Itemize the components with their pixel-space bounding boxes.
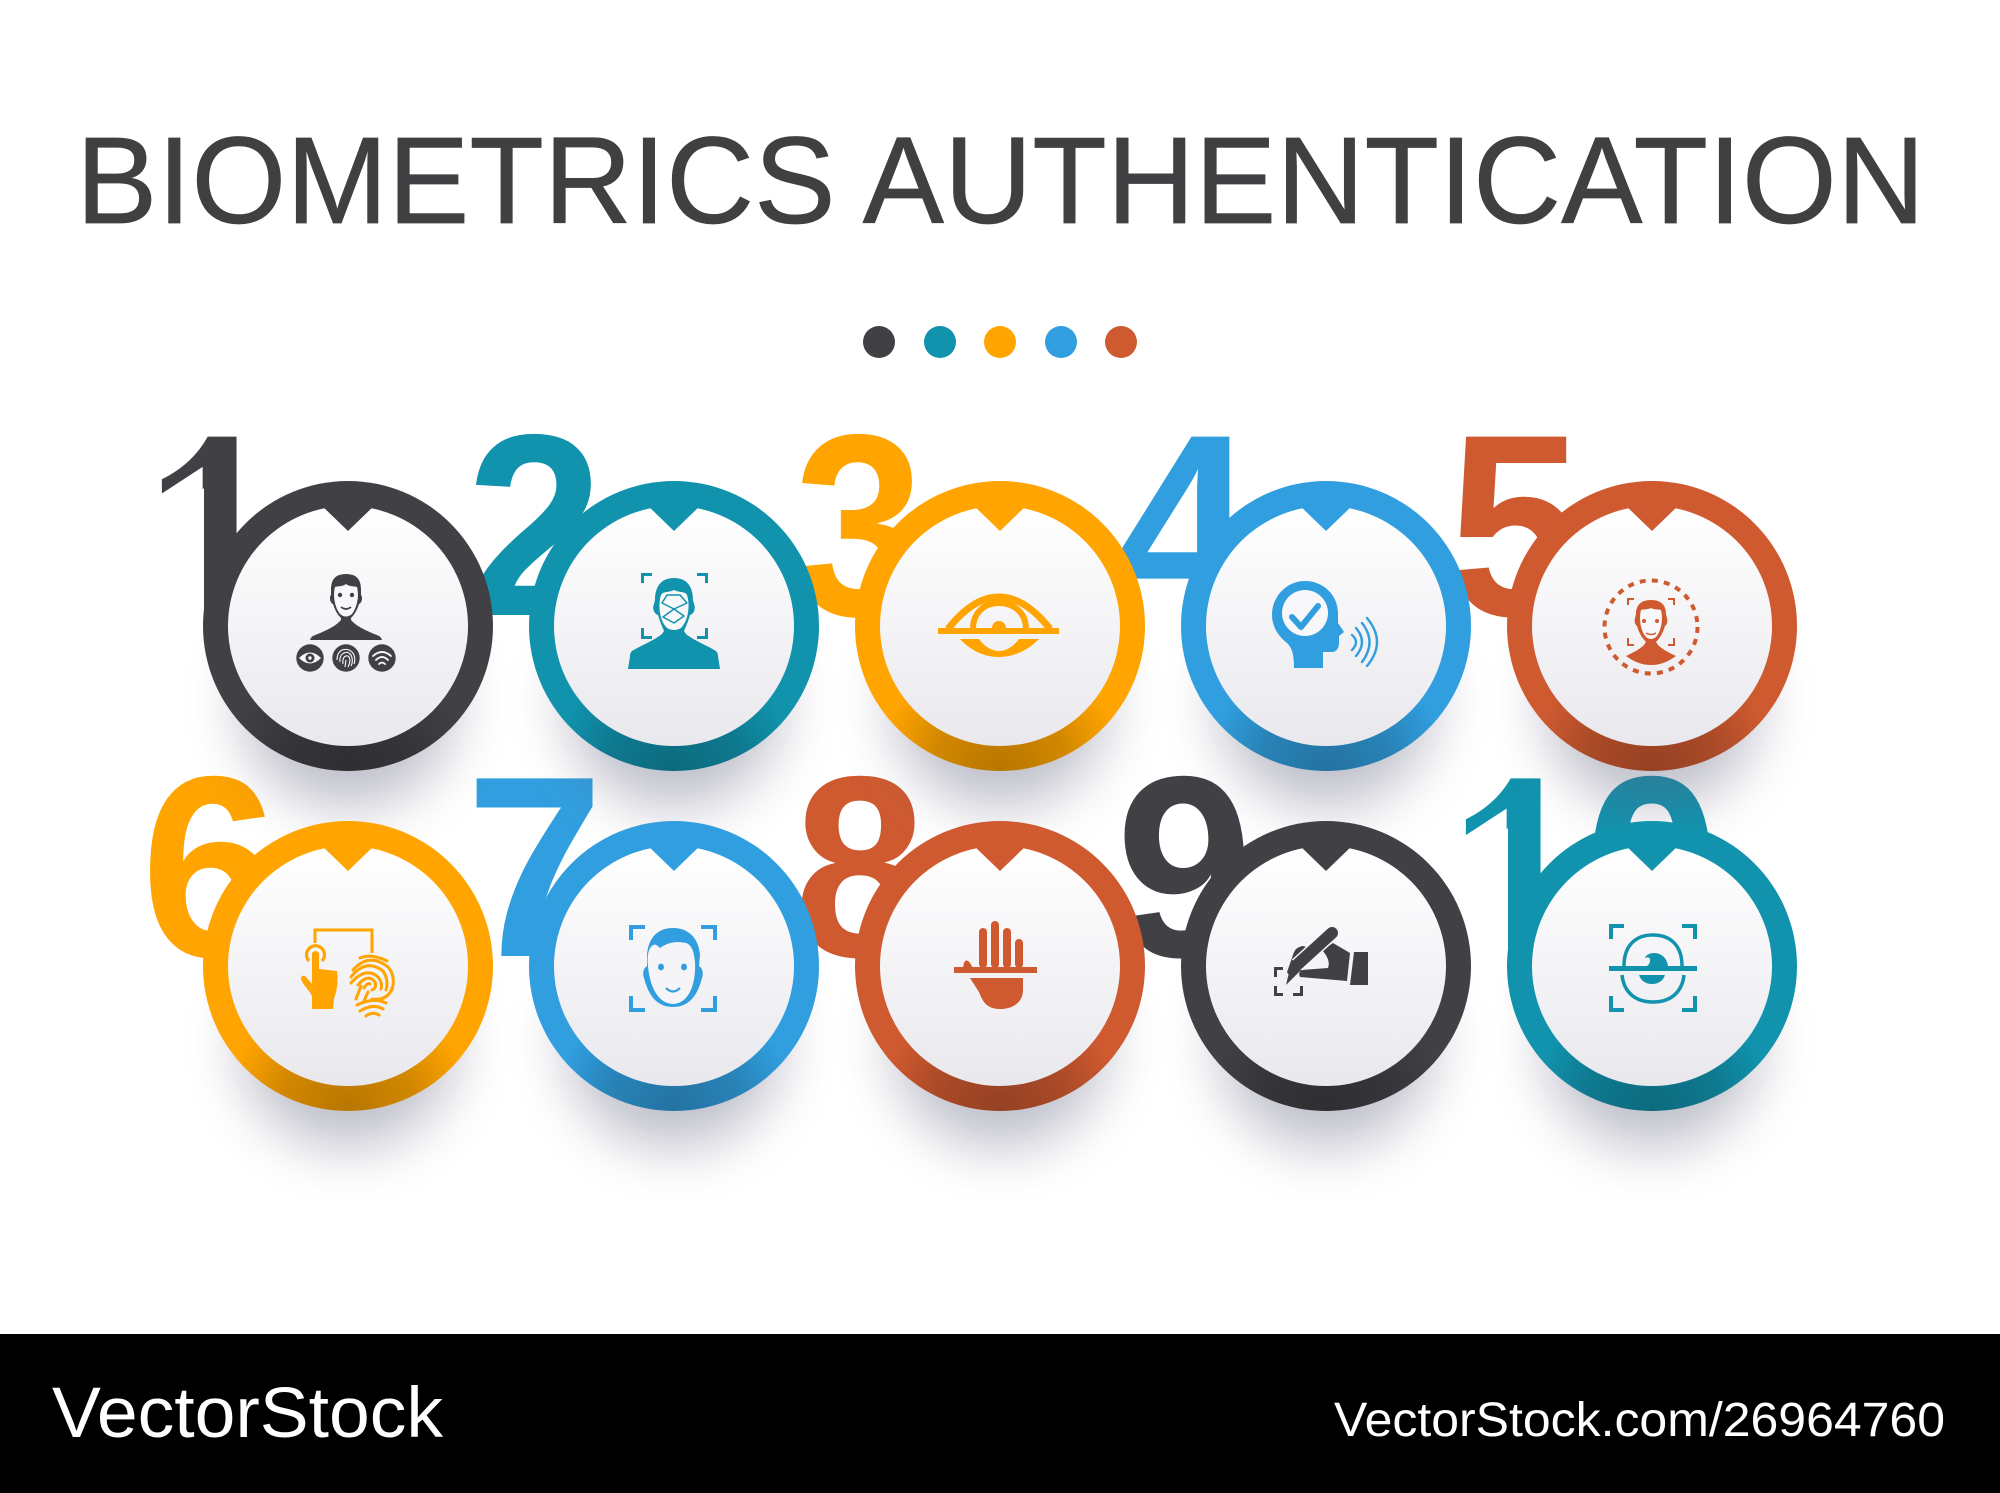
number 10: 1 [1449, 722, 1586, 1011]
icon: hand over scan line [954, 921, 1037, 1009]
icon: face mesh bust [628, 573, 720, 669]
icon: finger pressing and fingerprint [301, 930, 393, 1016]
icon: eye with scan line and brackets [1609, 924, 1697, 1012]
item 7: face scan outline [529, 821, 819, 1148]
number 9: 9 [1116, 722, 1253, 1011]
number 5: 5 [1448, 381, 1583, 671]
footer bar [0, 1334, 2000, 1493]
number 10 zero: 0 [1583, 722, 1720, 1011]
number 4: 4 [1116, 380, 1253, 670]
item 6: touch fingerprint [203, 821, 493, 1148]
footer image id: VectorStock.com/26964760 [1334, 1394, 1945, 1447]
number 2: 2 [466, 380, 603, 670]
number 6: 6 [141, 722, 278, 1011]
icon: face outline with corner brackets [629, 925, 717, 1012]
item 10: eye scan frame [1507, 821, 1797, 1148]
footer logo: VectorStock [52, 1374, 444, 1453]
colour dots [863, 326, 1137, 358]
number 1: 1 [145, 380, 282, 670]
icon: eye on scan line [938, 597, 1059, 657]
item 4: voice recognition [1181, 481, 1471, 808]
item 9: signature pen [1181, 821, 1471, 1148]
number 8: 8 [794, 723, 926, 1011]
icon: dashed face scan [1604, 580, 1698, 674]
icon: speaking head with check mark [1272, 581, 1377, 668]
number 7: 7 [466, 722, 603, 1011]
item 1: multi-factor person [203, 481, 493, 808]
title: BIOMETRICS AUTHENTICATION [76, 113, 1925, 250]
item 8: hand print scan [855, 821, 1145, 1148]
item 5: face in dotted circle [1507, 481, 1797, 808]
icon: person with eye, fingerprint and wave badges [296, 574, 396, 672]
item 3: iris eye [855, 481, 1145, 808]
icon: hand writing signature [1274, 932, 1368, 996]
item 2: facial mesh scan [529, 481, 819, 808]
number 3: 3 [794, 381, 925, 671]
